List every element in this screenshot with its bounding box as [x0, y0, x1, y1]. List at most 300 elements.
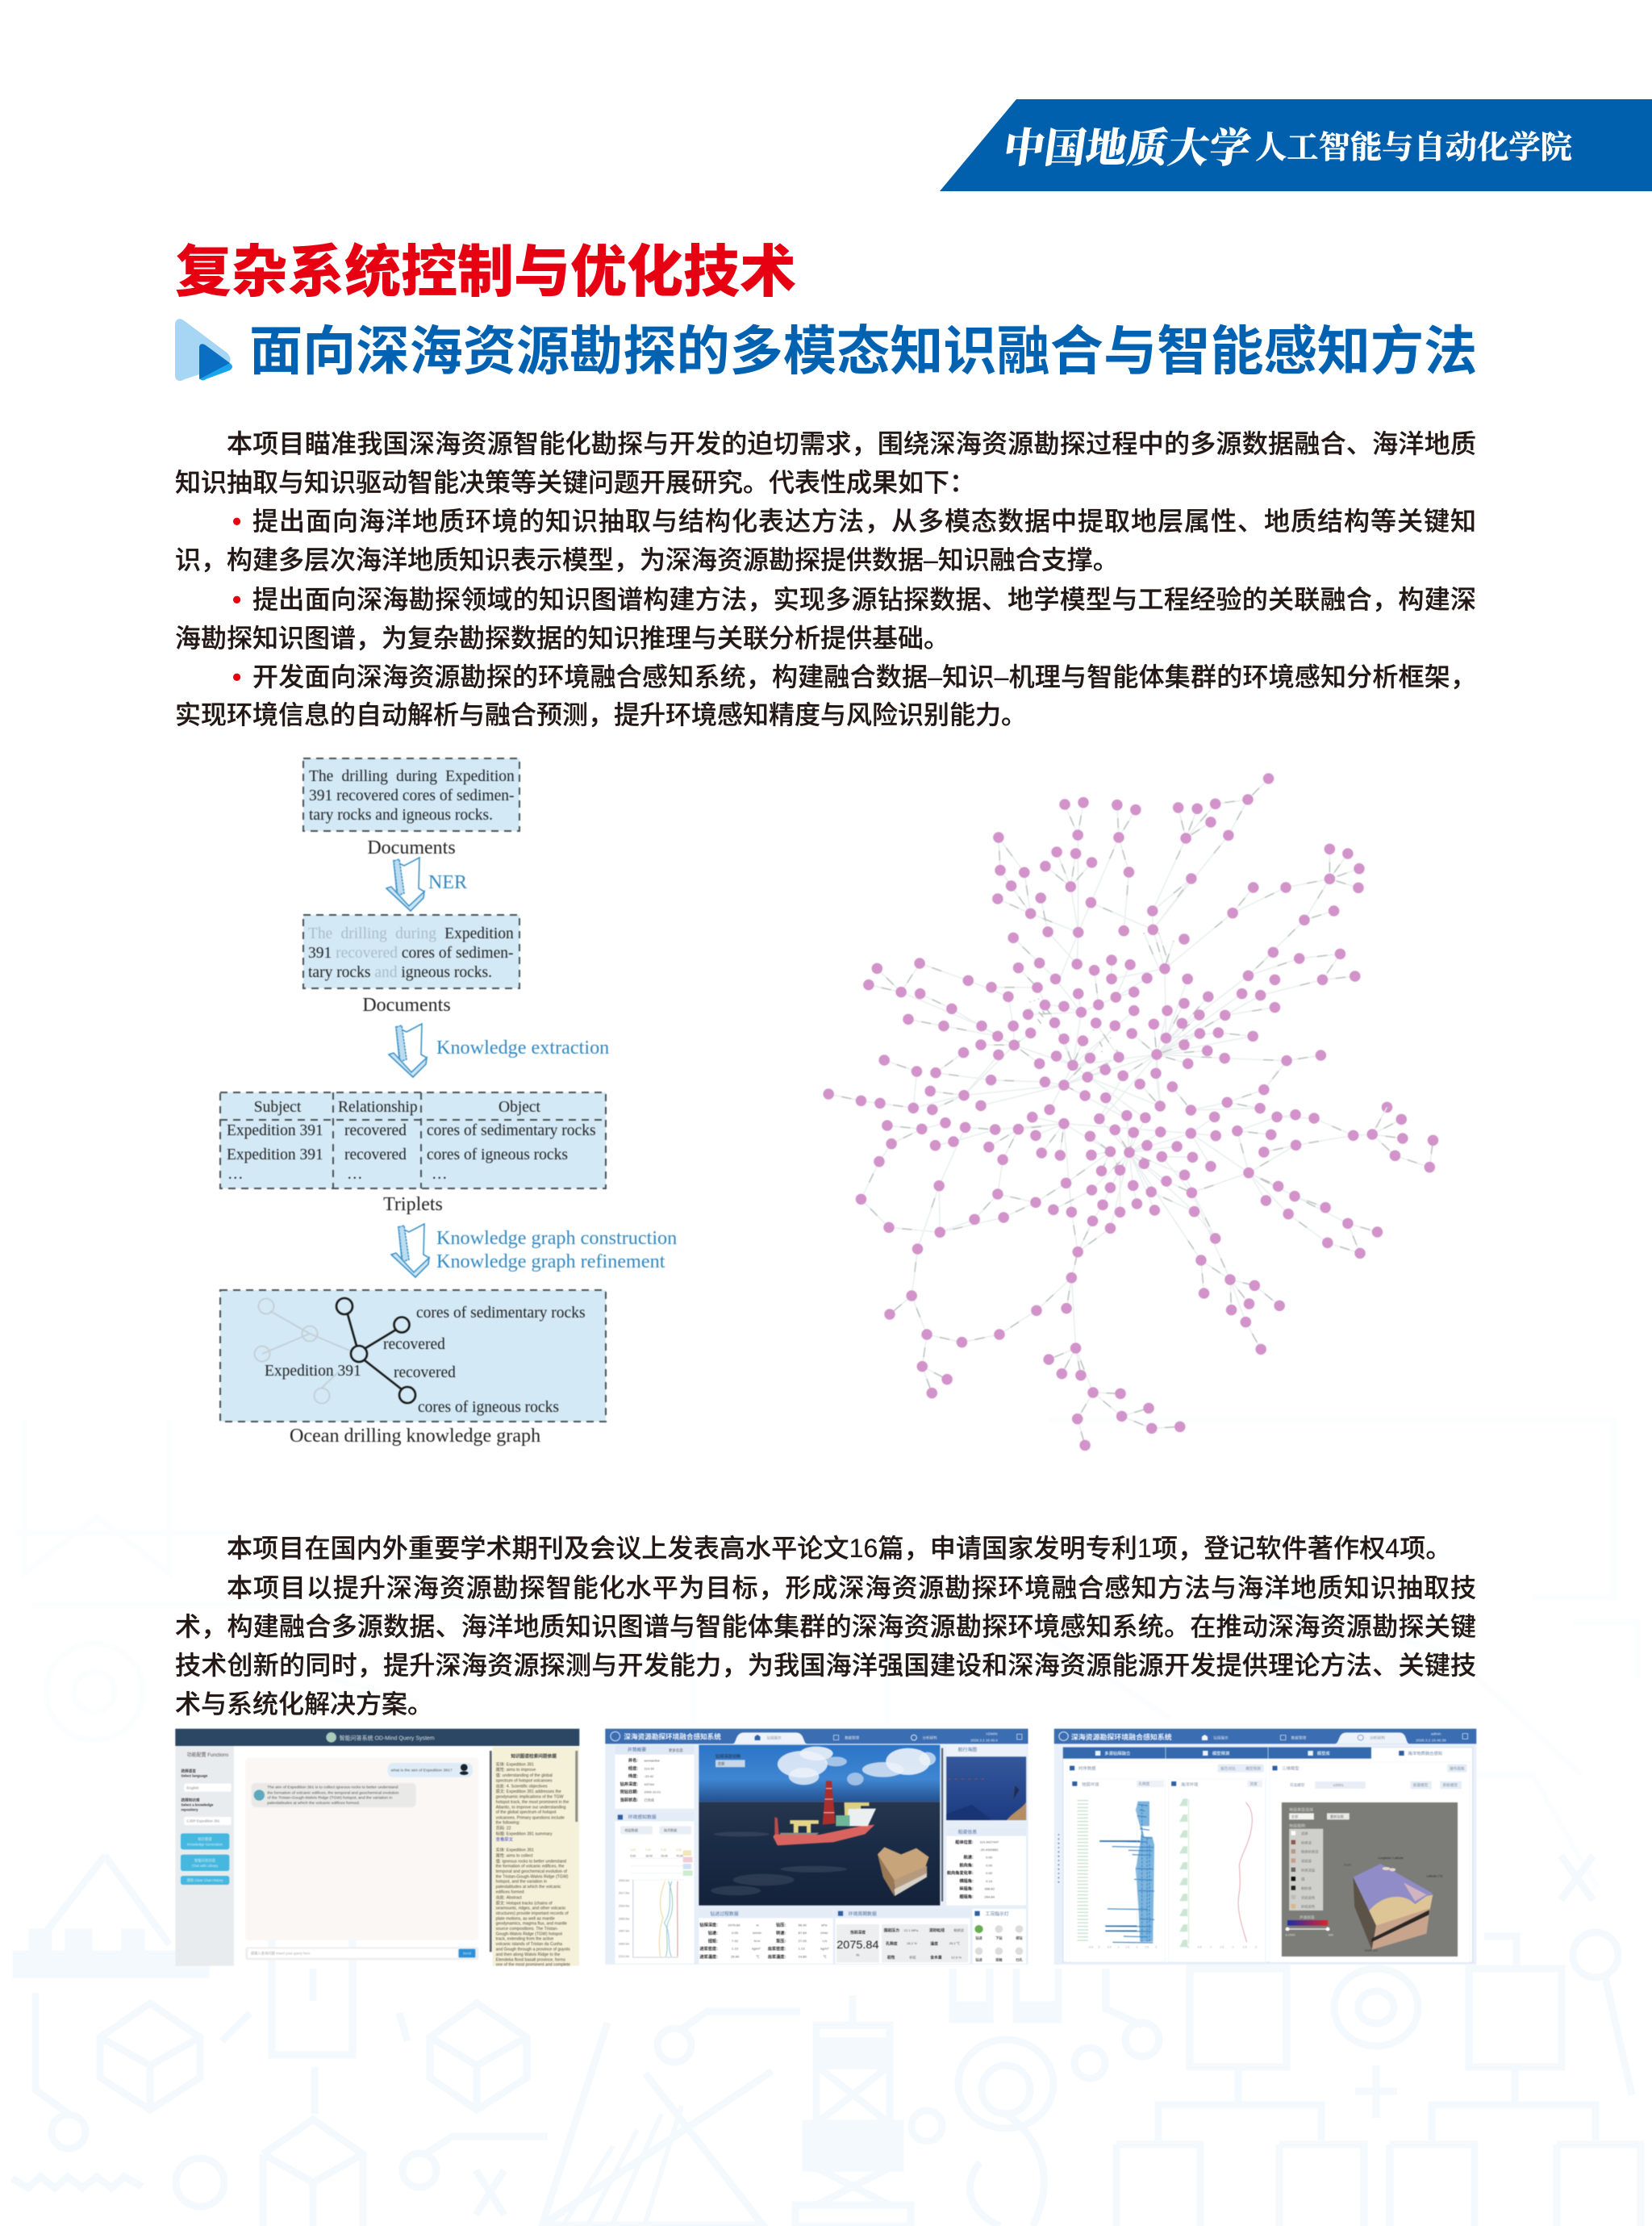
- panel: drilling data: 出浆密度:: [768, 1946, 786, 1952]
- text block: project introduction: 海勘探知识图谱，为复杂勘探数据的知识推理与关联分析提供基础。: [175, 624, 949, 653]
- panel: source document: 391 recovered cores of sedimen-: [309, 787, 514, 804]
- panel: ocean drilling knowledge graph: cores of sedimentary rocks: [416, 1305, 586, 1322]
- panel: status indicators: 下钻: [995, 1935, 1002, 1940]
- panel: drilling data: 25.50: [731, 1955, 740, 1959]
- panel: 3D model: 重新加载: [1330, 1814, 1344, 1819]
- panel: drilling data: r/min: [820, 1931, 828, 1935]
- sidebar: functions: Chat with Library: [192, 1864, 219, 1868]
- text block: project introduction: •: [232, 585, 241, 614]
- panel: ocean drilling knowledge graph: cores of igneous rocks: [418, 1399, 559, 1416]
- evidence panel: volcanic islands of Tristan da Cunha: [496, 1942, 562, 1947]
- panel: triplets table: cores of sedimentary rocks: [427, 1122, 596, 1139]
- panel: ship attitude: 航向角变化率:: [947, 1870, 974, 1876]
- panel: drilling data: ℃: [756, 1955, 759, 1959]
- panel: drilling data: 进浆密度:: [699, 1946, 718, 1952]
- panel: environment data: 泥砂粒径: [929, 1927, 945, 1933]
- chat panel: 请输入查询问题 Insert your query here: [251, 1951, 311, 1957]
- panel: well info: 纬度:: [628, 1773, 638, 1779]
- panel: tagged document: 391 recovered cores of sedimen-: [308, 945, 513, 962]
- evidence panel: Atlantic, to improve our understanding: [496, 1805, 566, 1810]
- panel: 3D model: 操作面板: [1450, 1766, 1465, 1771]
- sidebar: functions: Knowledge Generation: [187, 1842, 223, 1846]
- panel: ocean drilling knowledge graph: recovered: [383, 1336, 445, 1353]
- system header: 数据管理: [845, 1735, 860, 1741]
- panel: environment sensing curves: 地层数据: [624, 1827, 638, 1832]
- evidence panel: temporal and geochemical evolution of: [496, 1869, 567, 1874]
- chat panel: The aim of Expedition 391 is to collect igneous rocks to better understand: [267, 1785, 398, 1790]
- evidence panel: 原文: Hotspot tracks (chains of: [496, 1899, 553, 1906]
- label: NER: NER: [428, 872, 467, 893]
- caption: documents: Documents: [367, 837, 456, 858]
- evidence panel: hotspot track, the most prominent in the: [496, 1800, 569, 1805]
- panel: status indicators: 钻进: [975, 1935, 982, 1940]
- panel: ship attitude: 0.00: [986, 1871, 993, 1875]
- panel: well info: 已完成: [645, 1798, 654, 1802]
- text block: achievements and summary: 术与系统化解决方案。: [175, 1689, 433, 1719]
- evidence panel: the Tristan-Gough-Walvis Ridge (TGW): [496, 1874, 569, 1879]
- text block: project introduction: [175, 429, 1476, 729]
- panel: drilling data: 0.00: [732, 1931, 739, 1935]
- panel: environment data: 温度: [930, 1941, 938, 1947]
- panel: drilling data: 出浆温度:: [768, 1954, 786, 1960]
- system header: 数据管理: [1291, 1735, 1307, 1741]
- panel: time series data: 流速: [1249, 1781, 1258, 1787]
- sidebar: functions: Select a knowledge: [181, 1802, 214, 1806]
- panel: drilling data: 27.00: [799, 1939, 807, 1943]
- sidebar: functions: 功能配置 Functions: [187, 1752, 228, 1758]
- legend: [1289, 1829, 1323, 1911]
- label: construction and refinement: Knowledge graph refinement: [436, 1251, 665, 1272]
- panel: drilling data: 7.02: [732, 1939, 739, 1943]
- colour ramp: 声速剖面: [1299, 1915, 1315, 1920]
- panel: drilling data: 泵压:: [776, 1938, 786, 1944]
- panel: navigation map: 航行海图: [958, 1747, 977, 1753]
- panel: environment data: 围岩压力: [884, 1927, 899, 1933]
- caption: documents: Documents: [362, 995, 451, 1016]
- panel: environment sensing curves: 2101.0m: [619, 1955, 629, 1958]
- evidence panel: geodynamics, magma flux, and mantle: [496, 1922, 567, 1927]
- panel: well info: 钻井深度:: [620, 1781, 638, 1787]
- title: red section heading: 复杂系统控制与优化技术: [175, 240, 796, 303]
- panel: environment data: 含水量: [930, 1955, 942, 1961]
- evidence panel: paleolatitudes at which the volcanic: [496, 1885, 561, 1890]
- legend: 粉砂质: [1301, 1886, 1312, 1890]
- panel: drilling data: kg/m³: [820, 1947, 829, 1951]
- evidence panel: geodynamic implications of the TGW: [496, 1794, 564, 1799]
- panel: environment data: 2075.84: [836, 1939, 879, 1952]
- tab bar: 海洋地质融合感知: [1408, 1750, 1442, 1756]
- panel: ship attitude: 0.00: [986, 1863, 993, 1867]
- chat panel: of the Tristan-Gough-Walvis Ridge (TGW) hotspot, and the variation in: [267, 1796, 393, 1801]
- network upper half: [828, 779, 1387, 1119]
- chart: knowledge graph construction pipeline: [219, 757, 678, 1447]
- panel: environment sensing curves: 2067.0m: [619, 1930, 629, 1933]
- seabed block: [878, 1847, 929, 1896]
- panel: drilling data: N·m: [754, 1939, 761, 1943]
- panel: 3D drilling scene: 钻探深度切换: [715, 1753, 740, 1759]
- clouds: [778, 1747, 936, 1785]
- panel: well info: 经度:: [628, 1765, 638, 1771]
- evidence panel: spectrum of hotspot volcanoes: [496, 1778, 553, 1783]
- evidence panel: [490, 1747, 579, 1967]
- panel: well info: 4373m: [645, 1782, 655, 1786]
- chart: porosity log: 0: [1098, 1945, 1099, 1948]
- chart: porosity log: 1: [1118, 1945, 1120, 1948]
- evidence panel: track, extending from the active: [496, 1937, 553, 1942]
- panel: drilling data: [699, 1909, 833, 1964]
- panel: 3D model: 新建模型: [1413, 1782, 1429, 1788]
- panel: ship attitude: 艏摇角:: [959, 1894, 974, 1899]
- chart: porosity log: 0.5: [1108, 1945, 1112, 1948]
- evidence panel: 实体: Expedition 391: [496, 1760, 534, 1767]
- text block: project introduction: 实现环境信息的自动解析与融合预测，提升环境感知精度与风险识别能力。: [175, 700, 1027, 729]
- system header: 2026.3.2 15:45:38: [1416, 1739, 1446, 1743]
- panel: tagged document: The drilling during Expedition: [308, 925, 514, 942]
- panel: 3D model: 地层类型选择: [1289, 1807, 1313, 1813]
- evidence panel: plate motions, as well as mantle: [496, 1916, 555, 1921]
- chat panel: paleolatitudes at which the volcanic edifices formed.: [267, 1801, 360, 1806]
- panel: triplets table: recovered: [344, 1122, 407, 1139]
- panel: triplets table: Subject: [254, 1099, 302, 1116]
- arrow: knowledge graph construction: [391, 1224, 429, 1277]
- arrow: knowledge extraction: [389, 1024, 427, 1077]
- label: knowledge extraction: Knowledge extraction: [436, 1037, 609, 1059]
- tab bar: 模型预测: [1212, 1750, 1229, 1756]
- chart: current velocity: 0: [1187, 1945, 1189, 1948]
- text block: achievements and summary: 本项目以提升深海资源勘探智能化水平为目标，形成深海资源勘探环境融合感知方法与海洋地质知识抽取技: [227, 1573, 1476, 1602]
- panel: well info: 完钻日期:: [620, 1790, 638, 1795]
- panel: drilling data: kPa: [821, 1923, 828, 1927]
- text block: achievements and summary: 技术创新的同时，提升深海资源探测与开发能力，为我国海洋强国建设和深海资源能源开发提供理论方法、关键技: [175, 1651, 1476, 1680]
- sidebar: functions: 知识图谱: [198, 1836, 212, 1842]
- panel: environment sensing curves: 2000.0m: [619, 1879, 629, 1882]
- panel: drilling data: 1.13: [799, 1947, 805, 1951]
- panel: 3D drilling scene: [699, 1745, 940, 1906]
- panel: environment sensing curves: 海洋数据: [664, 1827, 677, 1832]
- text block: achievements and summary: 术，构建融合多源数据、海洋地质知识图谱与智能体集群的深海资源勘探环境感知系统。在推动深海资源勘探关键: [175, 1612, 1476, 1641]
- panel: drilling data: 进浆温度:: [699, 1954, 718, 1960]
- legend: 泥岩层: [1301, 1858, 1312, 1863]
- evidence panel: 值: understanding of the global: [496, 1772, 553, 1778]
- panel: status indicators: [973, 1909, 1026, 1964]
- panel: ship attitude: 船体位置:: [955, 1840, 974, 1845]
- legend: 泥质: [1301, 1831, 1308, 1836]
- chart: porosity log: 1.5: [1125, 1945, 1129, 1948]
- collapsed side handle: [1057, 1834, 1060, 1884]
- panel: 3D drilling scene: 全部: [717, 1761, 725, 1767]
- panel: triplets table: Object: [499, 1099, 541, 1116]
- panel: triplets table: recovered: [344, 1146, 407, 1163]
- query system header: [175, 1729, 579, 1746]
- panel: drilling data: L/s: [823, 1939, 827, 1943]
- sidebar: functions: repository: [181, 1807, 198, 1811]
- evidence panel: one of the most prominent and complete: [496, 1962, 570, 1967]
- panel: environment sensing curves: 0.00: [676, 1848, 682, 1852]
- sidebar: functions: 智能问答对话: [194, 1857, 216, 1863]
- panel: environment data: 当前深度: [850, 1930, 866, 1936]
- panel: ship attitude: -20.4300881: [980, 1848, 999, 1852]
- panel: source document: tary rocks and igneous rocks.: [309, 807, 493, 824]
- panel: drilling data: 钻探深度:: [699, 1923, 718, 1928]
- panel: triplets table: …: [432, 1166, 447, 1183]
- sidebar: functions: 选择语言: [181, 1769, 196, 1774]
- chart: porosity log: 3: [1155, 1945, 1157, 1948]
- legend: 砂质泥: [1301, 1840, 1312, 1844]
- panel: environment data: 孔隙度: [886, 1941, 898, 1947]
- system header: admin: [1431, 1732, 1441, 1736]
- panel: environment data: m: [857, 1953, 860, 1957]
- panel: 3D model: 可选模型: [1290, 1782, 1305, 1788]
- tab bar: 模型库: [1317, 1750, 1330, 1756]
- panel: triplets table: Expedition 391: [227, 1122, 323, 1139]
- panel: drilling data: 钻速:: [708, 1930, 718, 1936]
- panel: status indicators: 钻进: [975, 1957, 982, 1962]
- sidebar: functions: CJDP Expedition 391: [186, 1819, 220, 1823]
- panel: ship attitude: 264.84: [984, 1894, 995, 1898]
- panel: 3D model: [1270, 1762, 1470, 1962]
- system header: 钻探展示: [1213, 1735, 1229, 1741]
- panel: drilling data: 钻进过程数据: [711, 1911, 739, 1917]
- panel: ship attitude: 航向角:: [959, 1862, 974, 1868]
- caption: triplets: Triplets: [383, 1194, 443, 1215]
- system header: [1054, 1729, 1476, 1744]
- panel: ship attitude: 纵摇角:: [959, 1886, 974, 1892]
- panel: ship attitude: 0.00: [986, 1856, 993, 1860]
- evidence panel: hotspot, and the variation in: [496, 1880, 547, 1885]
- panel: time series data: 地层环境: [1082, 1781, 1099, 1787]
- panel: well info: 井名:: [628, 1757, 638, 1763]
- arrow: NER: [386, 858, 424, 911]
- panel: environment data: 22.1 MPa: [904, 1928, 919, 1932]
- icon: blue play triangle: [175, 319, 232, 381]
- evidence panel: 出处: 4. Scientific objectives: [496, 1782, 548, 1789]
- panel: well info: 114.34: [645, 1766, 655, 1770]
- panel: environment sensing curves: 18.00: [645, 1855, 653, 1858]
- panel: environment sensing curves: 2084.0m: [619, 1942, 629, 1945]
- sidebar: functions: Select language: [181, 1774, 208, 1778]
- panel: well info: [615, 1745, 695, 1809]
- panel: drilling data: 扭矩:: [708, 1938, 718, 1944]
- chart: porosity log: -0.5: [1088, 1945, 1093, 1948]
- evidence panel: and Gough through a province of guyots: [496, 1948, 570, 1952]
- text block: project introduction: •: [232, 507, 241, 536]
- panel: environment sensing curves: 0.00: [630, 1848, 636, 1852]
- chart: current velocity: 2: [1232, 1945, 1234, 1948]
- chat panel: what is the aim of Expedition 391?: [391, 1768, 453, 1773]
- chart: current velocity: 0.5: [1198, 1945, 1202, 1948]
- panel: 3D model: 全部: [1291, 1814, 1298, 1819]
- text block: project introduction: 识，构建多层次海洋地质知识表示模型，为深海资源勘探提供数据–知识融合支撑。: [175, 545, 1119, 574]
- panel: environment sensing curves: 0.00: [630, 1855, 636, 1858]
- panel: well info: -20.42: [645, 1774, 654, 1778]
- network lower half: [861, 1107, 1433, 1445]
- header banner: [940, 99, 1652, 191]
- panel: drilling data: 56.90: [799, 1923, 807, 1927]
- panel: time series data: 海洋环境: [1181, 1781, 1198, 1787]
- evidence panel: of the global spectrum of hotspot: [496, 1810, 557, 1815]
- chat panel: Send: [463, 1952, 472, 1956]
- panel: well info: 井筒概要: [628, 1747, 647, 1753]
- panel: environment data: 12.6 %: [951, 1955, 962, 1959]
- panel: ship attitude: 0.14: [986, 1879, 993, 1883]
- chart: current velocity: 1.5: [1220, 1945, 1224, 1948]
- system header: 2026.3.2 15:45:4: [970, 1739, 998, 1743]
- evidence panel: and then along Walvis Ridge to the: [496, 1952, 561, 1957]
- sidebar: functions: 清除 Clear Chat History: [186, 1877, 223, 1883]
- panel: status indicators: 接触: [995, 1957, 1002, 1962]
- tab bar: [1063, 1748, 1473, 1962]
- legend: 页岩岩性: [1301, 1894, 1315, 1899]
- colour ramp: 8.2000: [1286, 1933, 1295, 1936]
- panel: ship attitude: [946, 1827, 1026, 1906]
- evidence panel: seamounts, ridges, and other volcanic: [496, 1907, 566, 1911]
- panel: environment data: 18.2 %: [907, 1941, 917, 1945]
- panel: 3D model: 更新模型: [1443, 1782, 1458, 1788]
- panel: drilling data: 钻压:: [776, 1923, 786, 1928]
- chat panel: [245, 1757, 478, 1960]
- legend: 砂质泥层: [1301, 1867, 1315, 1872]
- text block: project introduction: 开发面向深海资源勘探的环境融合感知系统，构建融合数据–知识–机理与智能体集群的环境感知分析框架，: [252, 662, 1476, 691]
- panel: drilling data: 1.13: [732, 1947, 739, 1951]
- 3D geological cube: Latitude (°S): [1427, 1875, 1442, 1878]
- text block: project introduction: •: [232, 662, 241, 691]
- evidence panel: 属性: aims to improve: [496, 1766, 536, 1773]
- text block: achievements and summary: [175, 1534, 1476, 1719]
- chart: current velocity: 2.5: [1243, 1945, 1247, 1948]
- panel: environment data: [835, 1909, 970, 1964]
- panel: drilling data: 转速:: [776, 1930, 786, 1936]
- panel: time series data: [1066, 1762, 1266, 1962]
- query system header: 智能问答系统 OD-Mind Query System: [340, 1734, 435, 1741]
- evidence panel: the following:: [496, 1821, 520, 1826]
- evidence panel: structures) provide important records of: [496, 1911, 569, 1916]
- system header: 深海资源勘探环境融合感知系统: [624, 1733, 721, 1741]
- panel: ship attitude: 航速:: [964, 1855, 974, 1861]
- sea highlights: [711, 1831, 847, 1895]
- panel: well info: 2009.10.01: [645, 1790, 661, 1794]
- panel: drilling data: kg/m³: [752, 1947, 761, 1951]
- panel: triplets table: …: [227, 1166, 244, 1183]
- panel: tagged document: [303, 915, 519, 988]
- title: blue subheading: 面向深海资源勘探的多模态知识融合与智能感知方法: [249, 322, 1477, 382]
- legend: 粉质砂质泥: [1301, 1849, 1319, 1854]
- sidebar: functions: [175, 1746, 234, 1966]
- evidence panel: the formation of volcanic edifices, the: [496, 1865, 565, 1869]
- panel: environment data: 粉质泥: [954, 1927, 964, 1932]
- panel: environment sensing curves: [615, 1813, 695, 1964]
- evidence panel: Etendeka flood basalt province, forms: [496, 1957, 565, 1962]
- panel: tagged document: tary rocks and igneous rocks.: [308, 964, 492, 981]
- banner text: university name: 中国地质大学: [1000, 115, 1255, 174]
- panel: ship attitude: 358.82: [984, 1887, 995, 1891]
- panel: environment data: 砂岩: [909, 1954, 916, 1959]
- 3D geological cube: Depth: [1344, 1864, 1351, 1867]
- system header: 钻探展示: [767, 1735, 782, 1741]
- evidence panel: 原文: Expedition 391 addresses the: [496, 1788, 561, 1794]
- system header: 分析研判: [1370, 1735, 1385, 1741]
- panel: triplets table: [220, 1092, 606, 1188]
- sidebar: functions: English: [186, 1785, 199, 1790]
- legend: 煤: [1301, 1877, 1304, 1881]
- panel: navigation map: [946, 1745, 1026, 1820]
- panel: environment sensing curves: 0.00: [661, 1848, 666, 1852]
- evidence panel: 页码: 22: [496, 1824, 511, 1831]
- label: construction and refinement: Knowledge graph construction: [436, 1227, 677, 1249]
- text block: achievements and summary: 本项目在国内外重要学术期刊及会议上发表高水平论文16篇，申请国家发明专利1项，登记软件著作权4项。: [227, 1534, 1452, 1563]
- evidence panel: 标题: Expedition 391 summary: [496, 1830, 553, 1836]
- panel: 3D model: 地层图例: [1289, 1823, 1305, 1829]
- legend: 砂岩岩性: [1301, 1904, 1315, 1909]
- panel: environment sensing curves: 2017.0m: [619, 1892, 629, 1895]
- evidence panel: edifices formed: [496, 1890, 524, 1894]
- scene scrollbar: [941, 1748, 943, 1902]
- evidence panel: 查看原文: [496, 1836, 514, 1843]
- panel: ship attitude: 船姿信息: [958, 1829, 977, 1836]
- panel: drilling data: m/min: [753, 1931, 761, 1935]
- panel: time series data: 报告对比: [1220, 1766, 1236, 1771]
- evidence panel: 值: igneous rocks to better understand: [496, 1857, 566, 1864]
- text block: project introduction: 本项目瞄准我国深海资源智能化勘探与开发的迫切需求，围绕深海资源勘探过程中的多源数据融合、海洋地质: [227, 429, 1476, 458]
- caption: ocean drilling knowledge graph: Ocean drilling knowledge graph: [290, 1426, 540, 1447]
- chart: current velocity: [1179, 1798, 1257, 1948]
- chart: porosity log: 2.5: [1145, 1945, 1149, 1948]
- label: construction and refinement: [436, 1227, 677, 1272]
- panel: time series data: 孔隙度: [1138, 1781, 1150, 1787]
- panel: 3D model: u3001: [1333, 1783, 1344, 1787]
- panel: environment sensing curves: 0.00: [645, 1848, 651, 1852]
- colour ramp: [1286, 1915, 1333, 1936]
- panel: environment sensing curves: 70.00: [676, 1855, 683, 1858]
- evidence panel: 实体: Expedition 391: [496, 1846, 534, 1852]
- panel: triplets table: cores of igneous rocks: [427, 1146, 568, 1163]
- panel: triplets table: Expedition 391: [227, 1146, 323, 1163]
- system header: 深海资源勘探环境融合感知系统: [1071, 1732, 1172, 1741]
- panel: drilling data: ℃: [824, 1955, 827, 1959]
- panel: well info: 当前状态:: [620, 1798, 638, 1803]
- panel: 3D model: 三维模型: [1282, 1765, 1299, 1772]
- tab bar: 多源钻探融合: [1104, 1750, 1131, 1756]
- chart: current velocity: 1: [1210, 1945, 1212, 1948]
- 3D geological cube: Longitude / Latitude: [1379, 1856, 1404, 1860]
- system header: ADMIN: [986, 1732, 998, 1736]
- panel: environment data: 岩性: [887, 1955, 895, 1961]
- text block: project introduction: 提出面向海洋地质环境的知识抽取与结构化表达方法，从多模态数据中提取地层属性、地质结构等关键知: [252, 507, 1476, 536]
- panel: time series data: 时序数据: [1078, 1765, 1096, 1772]
- colour ramp: 189: [1328, 1933, 1333, 1936]
- panel: ship attitude: 114.3427447: [980, 1840, 999, 1844]
- evidence panel: Gough-Walvis Ridge (TGW) hotspot: [496, 1932, 563, 1936]
- panel: environment data: 26.2 ℃: [949, 1941, 960, 1945]
- system header: 分析研判: [923, 1735, 937, 1741]
- panel: well info: semiactive: [645, 1758, 661, 1762]
- evidence panel: 属性: aims to collect: [496, 1852, 533, 1858]
- system header: [605, 1729, 1028, 1744]
- evidence panel: 知识图谱检索问题依据: [511, 1752, 557, 1759]
- panel: drilling data: m: [756, 1923, 759, 1927]
- panel: triplets table: Relationship: [338, 1099, 418, 1116]
- panel: well info: 更多信息: [669, 1748, 683, 1753]
- panel: ocean drilling knowledge graph: [220, 1290, 606, 1422]
- chat panel: the formation of volcanic edifices, the temporal and geochemical evolution: [267, 1790, 399, 1795]
- panel: ocean drilling knowledge graph: Expedition 391: [265, 1363, 361, 1380]
- panel: ship attitude: 横摇角:: [959, 1878, 974, 1884]
- panel: environment sensing curves: 环境感知数据: [628, 1814, 657, 1820]
- panel: source document: [303, 758, 519, 831]
- banner text: college name: 人工智能与自动化学院: [1255, 123, 1572, 168]
- panel: environment sensing curves: 2034.0m: [619, 1904, 629, 1907]
- evidence panel: 出处: Abstract: [496, 1894, 522, 1900]
- panel: environment data: 环境周期数据: [849, 1911, 877, 1917]
